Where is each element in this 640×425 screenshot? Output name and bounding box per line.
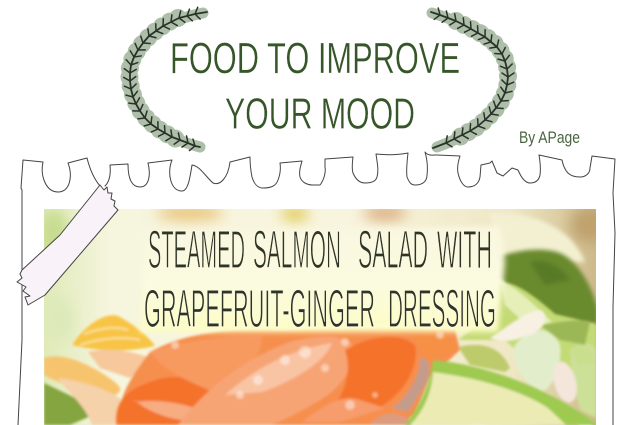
pale back leaf — [490, 213, 585, 262]
salad photo: WITH — [437, 220, 492, 280]
photo base — [44, 209, 596, 425]
orange peel and citrus — [44, 315, 158, 425]
salmon slices — [116, 328, 460, 425]
salt specks on salmon — [171, 331, 444, 410]
title: YOUR MOOD — [225, 90, 415, 138]
white beans — [470, 311, 592, 425]
washi tape — [17, 185, 118, 305]
wreath: left laurel branch — [129, 12, 207, 147]
byline: By APage — [519, 128, 580, 147]
torn paper outline — [18, 152, 615, 425]
wreath: right laurel branch — [431, 12, 508, 148]
photo heading: SALAD — [358, 220, 428, 280]
photo heading: SALMON — [253, 220, 341, 280]
photo heading: STEAMED — [148, 220, 245, 280]
avocado slice — [405, 360, 596, 425]
light lettuce — [458, 280, 596, 418]
pale haze behind the heading — [140, 226, 505, 332]
title — [170, 34, 460, 138]
salad photo — [40, 206, 610, 425]
photo heading — [145, 230, 494, 328]
blurred background greens and tans — [44, 209, 596, 334]
dark lettuce — [495, 250, 598, 325]
title: FOOD TO IMPROVE — [170, 34, 460, 83]
